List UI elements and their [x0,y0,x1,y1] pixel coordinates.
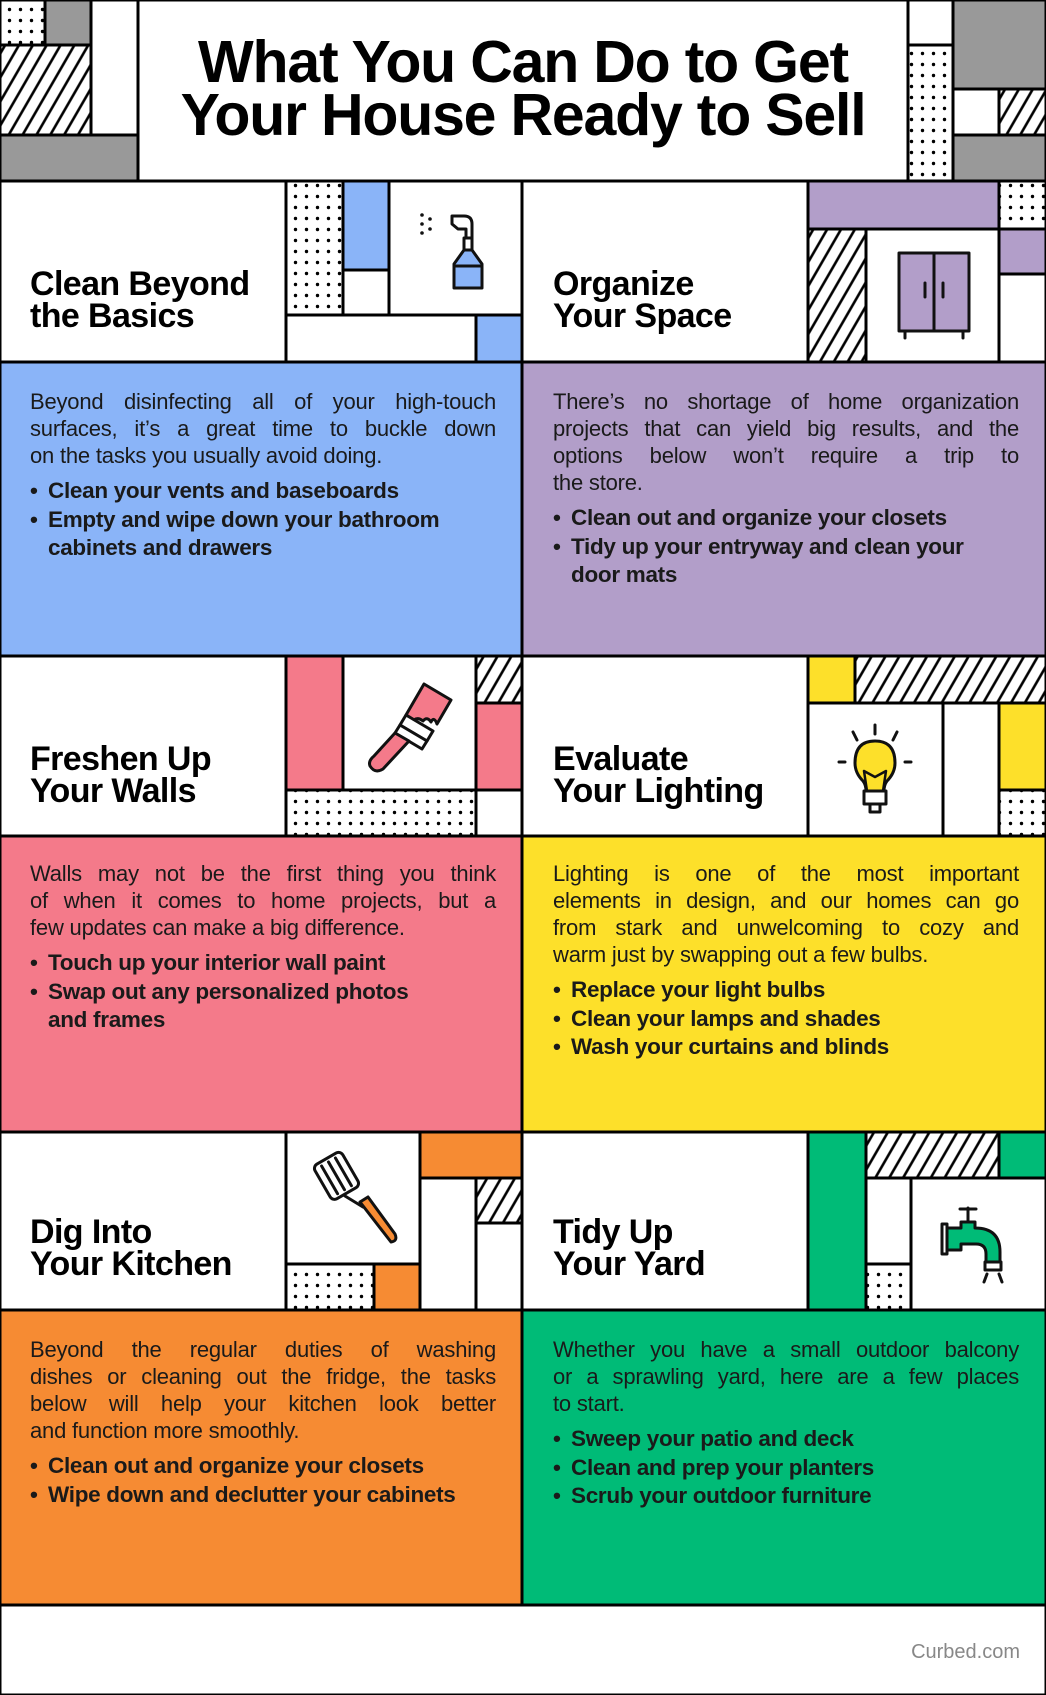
text: yard: Scrub your outdoor furniture [571,1483,871,1508]
text: walls: of when it comes to home projects, but a [30,888,496,913]
text: organize [553,389,1019,587]
panel body: organize [522,362,1046,656]
text: walls: Swap out any personalized photos [48,978,408,1004]
text: kitchen: below will help your kitchen look better [30,1391,496,1416]
heading: yard: Tidy Up [553,1213,673,1251]
text: lighting [553,861,1020,1059]
text: organize: door mats [571,562,677,587]
panel header: walls [0,656,522,836]
heading: lighting [553,740,764,810]
title [181,29,865,148]
heading: yard: Your Yard [553,1245,705,1283]
heading: clean: the Basics [30,297,194,335]
text: kitchen: and function more smoothly. [30,1418,299,1443]
text: organize: options below won’t require a trip to [553,443,1019,468]
heading: kitchen: Your Kitchen [30,1245,232,1283]
text: clean [30,389,496,560]
text: kitchen: Clean out and organize your closets [48,1453,424,1478]
text: kitchen [30,1337,496,1506]
icon: light bulb [839,725,911,812]
heading: walls: Freshen Up [30,740,211,778]
footer [0,1605,1046,1695]
panel body: kitchen [0,1310,522,1605]
text: lighting: warm just by swapping out a few bulbs. [553,942,928,967]
text: lighting: from stark and unwelcoming to cozy and [553,915,1019,940]
header title box [138,0,908,181]
text: walls: and frames [48,1007,165,1032]
text: yard: Sweep your patio and deck [571,1426,854,1451]
text: walls: Walls may not be the first thing you think [30,861,496,886]
text: clean: Empty and wipe down your bathroom [48,506,439,532]
title: What You Can Do to Get [198,29,848,95]
text: organize: Tidy up your entryway and clean your [571,534,964,558]
text: organize: Clean out and organize your closets [571,505,947,530]
text: organize: projects that can yield big results, and the [553,416,1019,441]
heading: organize: Your Space [553,297,732,335]
panel header: lighting [522,656,1046,836]
text: clean: surfaces, it’s a great time to buckle down [30,416,496,441]
panel body: lighting [522,836,1046,1132]
panel body: walls [0,836,522,1132]
heading: clean [30,265,250,335]
text: yard: Clean and prep your planters [571,1454,874,1480]
footer credit: Curbed.com [911,1641,1020,1663]
icon: cabinet [899,253,969,338]
text: yard: to start. [553,1391,625,1416]
text: lighting: Clean your lamps and shades [571,1006,881,1030]
panel header: organize [522,181,1046,362]
text: walls: Touch up your interior wall paint [48,950,385,975]
text: organize: There’s no shortage of home organization [553,389,1019,414]
heading: clean: Clean Beyond [30,265,250,303]
text: lighting: Replace your light bulbs [571,977,825,1002]
text: lighting: Lighting is one of the most important [553,861,1019,886]
text: kitchen: Wipe down and declutter your cabinets [48,1482,456,1506]
icon: faucet [942,1208,1002,1282]
text: lighting: Wash your curtains and blinds [571,1034,889,1059]
text: walls: few updates can make a big difference. [30,915,405,940]
heading: walls: Your Walls [30,772,196,810]
title: Your House Ready to Sell [181,82,865,148]
text: kitchen: Beyond the regular duties of washing [30,1337,496,1362]
panel header: clean [0,181,522,362]
text: clean: cabinets and drawers [48,535,272,560]
text: clean: Beyond disinfecting all of your high-touch [30,389,496,414]
heading: walls [30,740,211,810]
text: yard: or a sprawling yard, here are a few places [553,1364,1019,1389]
heading: lighting: Evaluate [553,740,688,778]
text: yard: Whether you have a small outdoor balcony [553,1337,1019,1362]
header decoration right [908,0,1046,181]
heading: kitchen [30,1213,232,1283]
heading: yard [553,1213,705,1283]
panel body: clean [0,362,522,656]
text: kitchen: dishes or cleaning out the fridge, the tasks [30,1364,496,1389]
icon: spatula [313,1151,396,1242]
text: walls [30,861,496,1032]
text: yard [553,1337,1020,1508]
heading: organize: Organize [553,265,694,303]
text: clean: on the tasks you usually avoid doing. [30,443,382,468]
header decoration left [0,0,138,181]
heading: kitchen: Dig Into [30,1213,152,1251]
panel header: kitchen [0,1132,522,1310]
text: organize: the store. [553,470,643,495]
text: clean: Clean your vents and baseboards [48,478,399,503]
text: lighting: elements in design, and our homes can go [553,888,1019,913]
icon: paint brush [370,684,451,771]
panel header: yard [522,1132,1046,1310]
heading: organize [553,265,732,335]
heading: lighting: Your Lighting [553,772,764,810]
icon: spray bottle [420,213,482,288]
panel body: yard [522,1310,1046,1605]
